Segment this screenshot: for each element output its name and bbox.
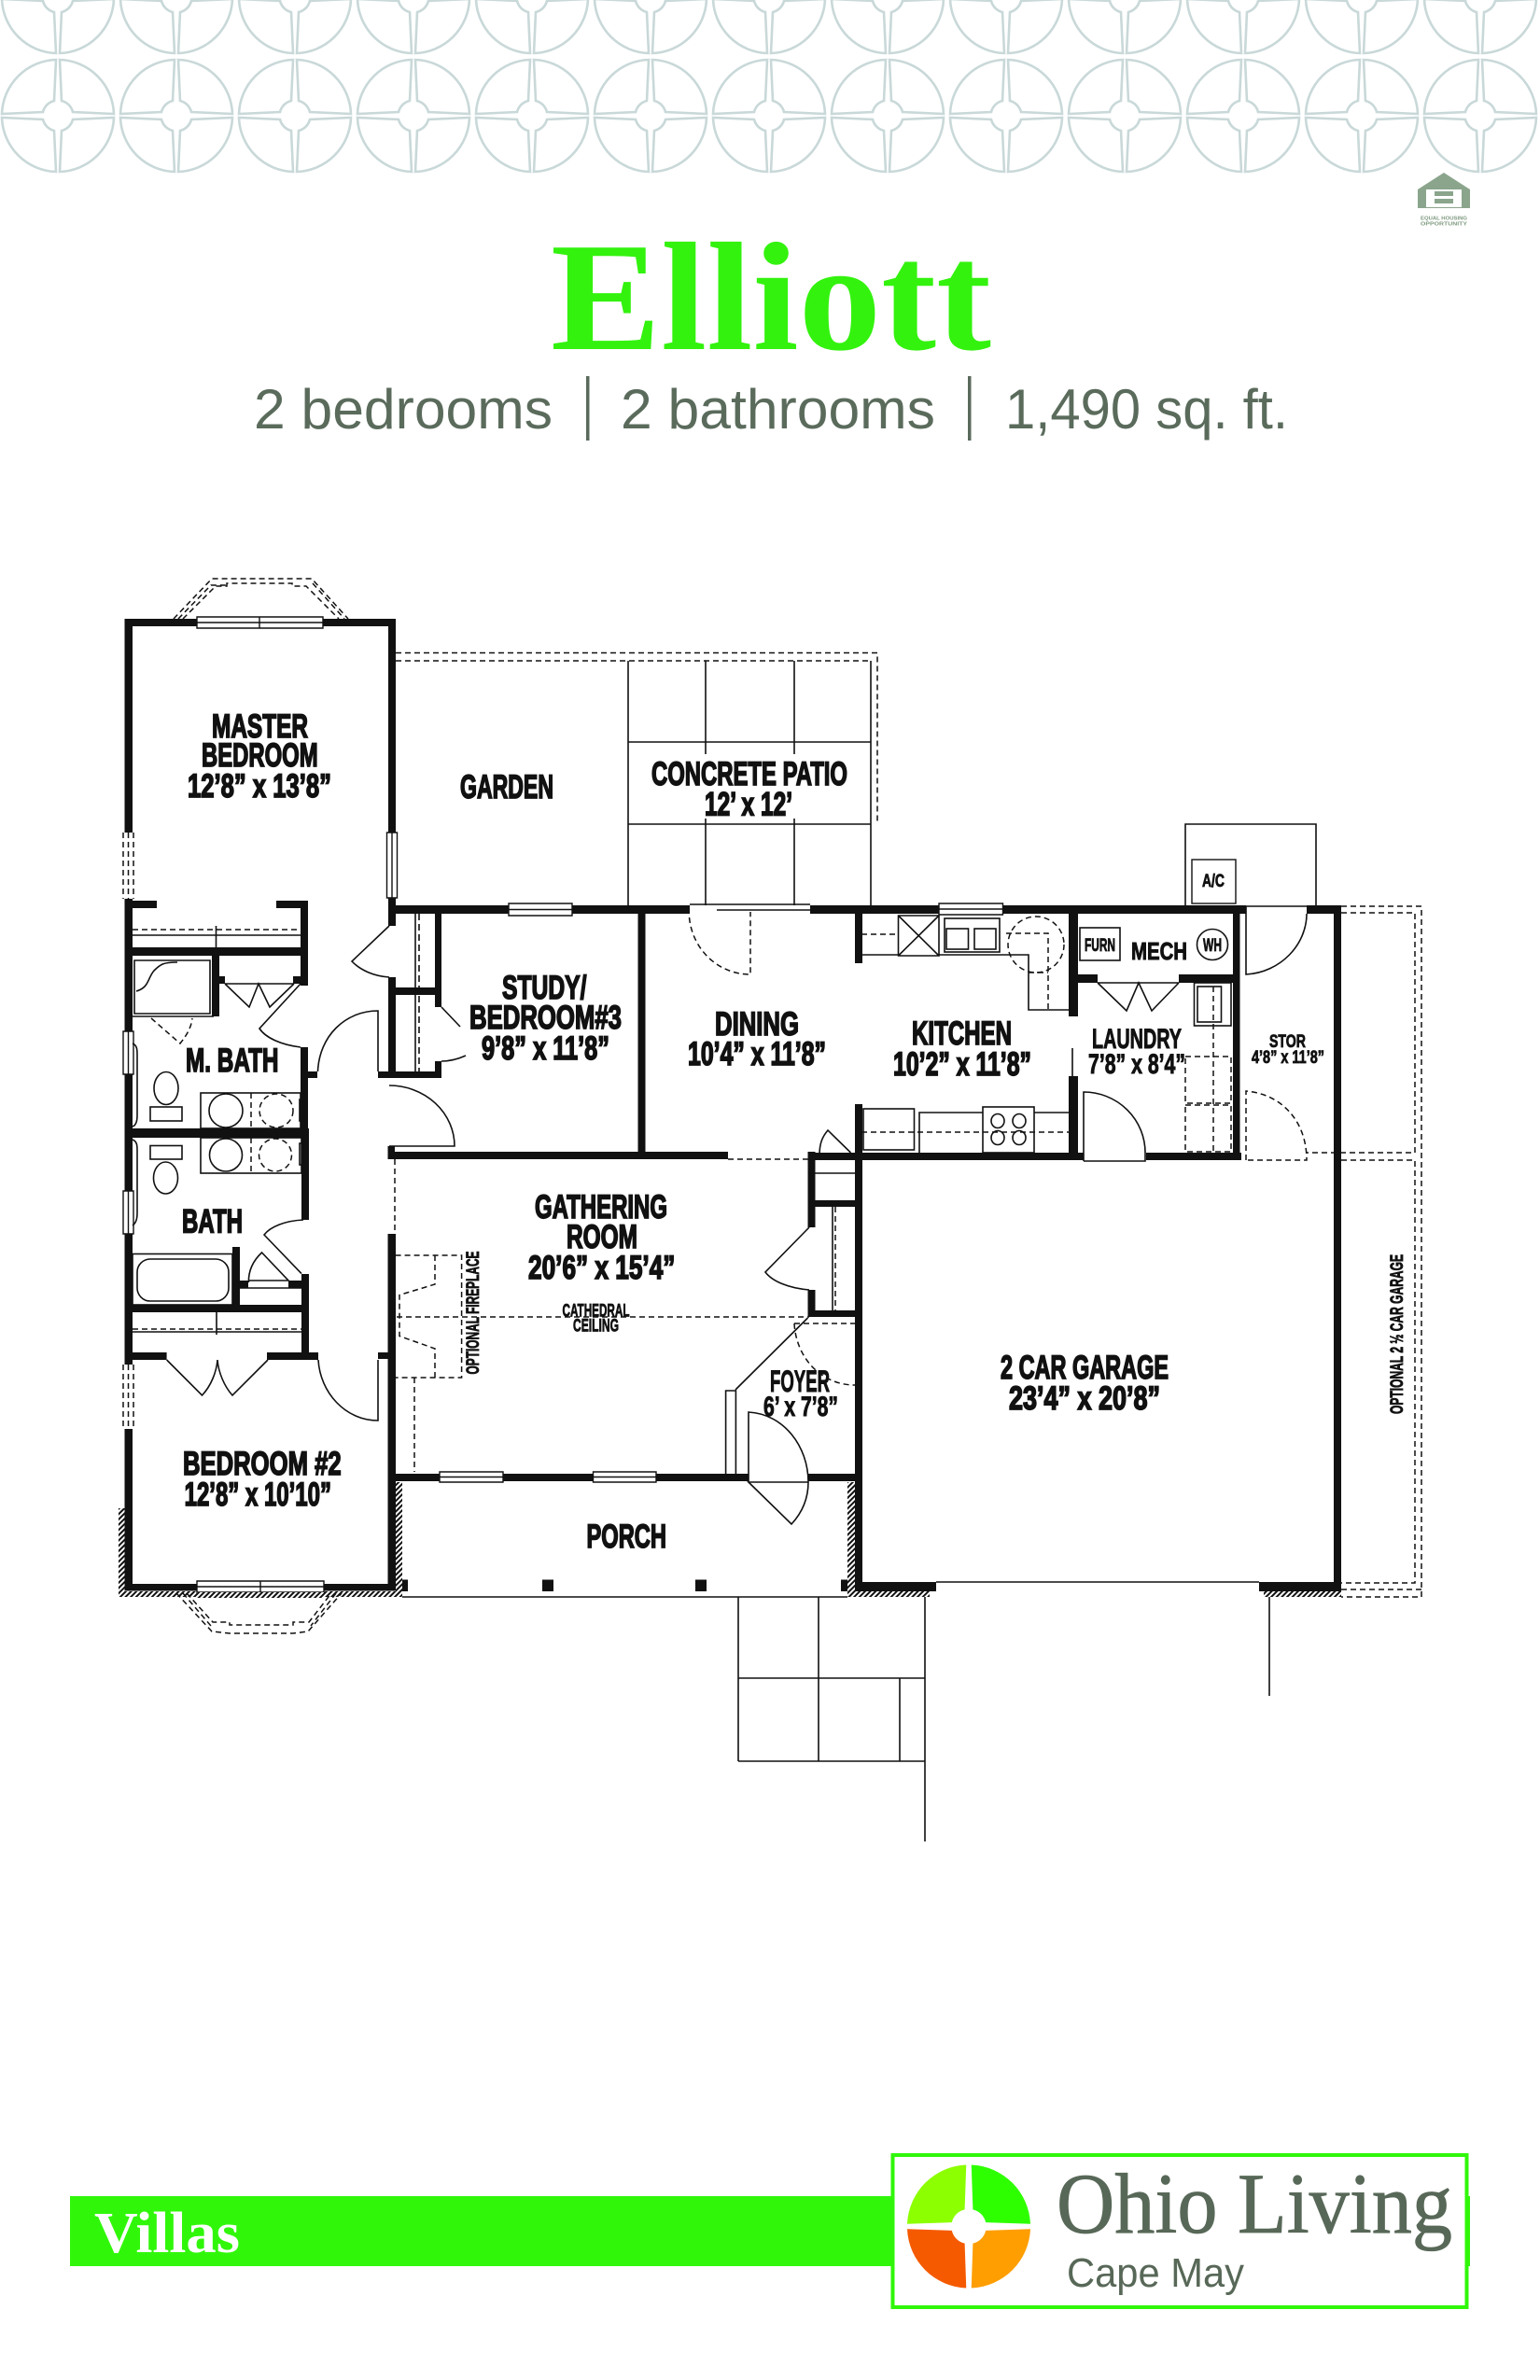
icon: equal housing opportunity [1418,173,1470,228]
label: foyer [763,1365,838,1422]
label: garage: 23’4” x 20’8” [1009,1380,1160,1417]
label: A/C: A/C [1202,872,1225,891]
label: study: STUDY/ [502,970,587,1006]
label: laundry: 7’8” x 8’4” [1088,1049,1185,1080]
subtitle: plan statistics: 1,490 sq. ft. [1005,378,1288,441]
label: dining: DINING [715,1006,799,1043]
label: master bath: M. BATH [186,1043,278,1079]
windows [123,579,1002,1633]
label: storage: 4’8” x 11’8” [1252,1048,1324,1068]
subtitle: plan statistics: 2 bedrooms [254,378,553,441]
label: gathering room: 20’6” x 15’4” [528,1250,675,1286]
label: optional fireplace: OPTIONAL FIREPLACE [464,1251,483,1374]
label: dining [688,1006,826,1072]
label: laundry [1088,1024,1185,1080]
icon: equal housing opportunity: EQUAL HOUSING [1421,217,1467,222]
mechanical and laundry fixtures [1080,928,1231,1153]
label: cathedral ceiling: CEILING [573,1316,619,1337]
doors [167,904,1307,1582]
subtitle: plan statistics: 2 bathrooms [621,378,935,441]
kitchen fixtures [861,916,1069,1153]
optional garage extension dashes [1307,906,1421,1597]
bathroom and closet fixtures [133,914,855,1335]
label: foyer: 6’ x 7’8” [763,1392,838,1422]
label: cathedral ceiling: CATHEDRAL [562,1301,630,1322]
outdoor outlines: patio, walkway, driveway, A/C pad [396,653,1316,1841]
label: mech: MECH [1131,937,1187,965]
label: storage: STOR [1269,1032,1306,1052]
label: master bedroom [188,708,331,805]
label: kitchen [893,1015,1031,1083]
label: concrete patio: 12’ x 12’ [705,786,792,823]
label: bedroom 2: BEDROOM #2 [183,1446,342,1482]
logo location: Cape May [1067,2250,1244,2296]
logo wordmark: Ohio Living [1057,2156,1452,2251]
label: study [469,970,622,1067]
label: study: 9’8” x 11’8” [482,1030,609,1067]
label: bedroom 2: 12’8” x 10’10” [185,1477,331,1513]
label: garage [1001,1350,1169,1417]
label: garden: GARDEN [460,769,553,805]
label: laundry: LAUNDRY [1092,1024,1182,1055]
icon: equal housing opportunity: OPPORTUNITY [1421,222,1467,228]
label: foyer: FOYER [770,1365,830,1398]
room labels [182,708,1407,1555]
icon: Ohio Living quadrant emblem [907,2165,1030,2289]
label: kitchen: KITCHEN [912,1015,1012,1052]
label: gathering room: GATHERING [535,1189,667,1225]
label: master bedroom: MASTER [212,708,308,745]
label: porch: PORCH [586,1519,666,1555]
label: furnace: FURN [1085,936,1115,956]
fireplace and ceiling dashes [395,1159,809,1472]
label: optional garage: OPTIONAL 2 ½ CAR GARAGE [1388,1254,1407,1414]
footer band: Villas: Villas [94,2202,240,2265]
label: storage [1252,1032,1324,1068]
label: master bedroom: 12’8” x 13’8” [188,768,331,805]
label: cathedral ceiling [562,1301,630,1337]
subtitle: plan statistics [254,376,1288,441]
label: master bedroom: BEDROOM [202,737,318,774]
title: Elliott [551,211,991,383]
label: kitchen: 10’2” x 11’8” [893,1046,1031,1083]
label: concrete patio [651,756,847,823]
hatched exterior veneer [119,1482,1341,1597]
label: bath: BATH [182,1204,243,1239]
background pattern of circles [2,0,1536,172]
logo box [892,2155,1467,2307]
label: bedroom 2 [183,1446,342,1513]
label: water heater: WH [1203,936,1222,956]
footer band: Villas [70,2196,1470,2266]
walls [125,619,1341,1591]
label: garage: 2 CAR GARAGE [1001,1350,1169,1386]
label: study: BEDROOM#3 [469,1000,622,1036]
label: dining: 10’4” x 11’8” [688,1036,826,1072]
label: gathering room: ROOM [567,1219,637,1255]
floor plan [119,579,1421,1841]
label: gathering room [528,1189,675,1286]
label: concrete patio: CONCRETE PATIO [651,756,847,792]
